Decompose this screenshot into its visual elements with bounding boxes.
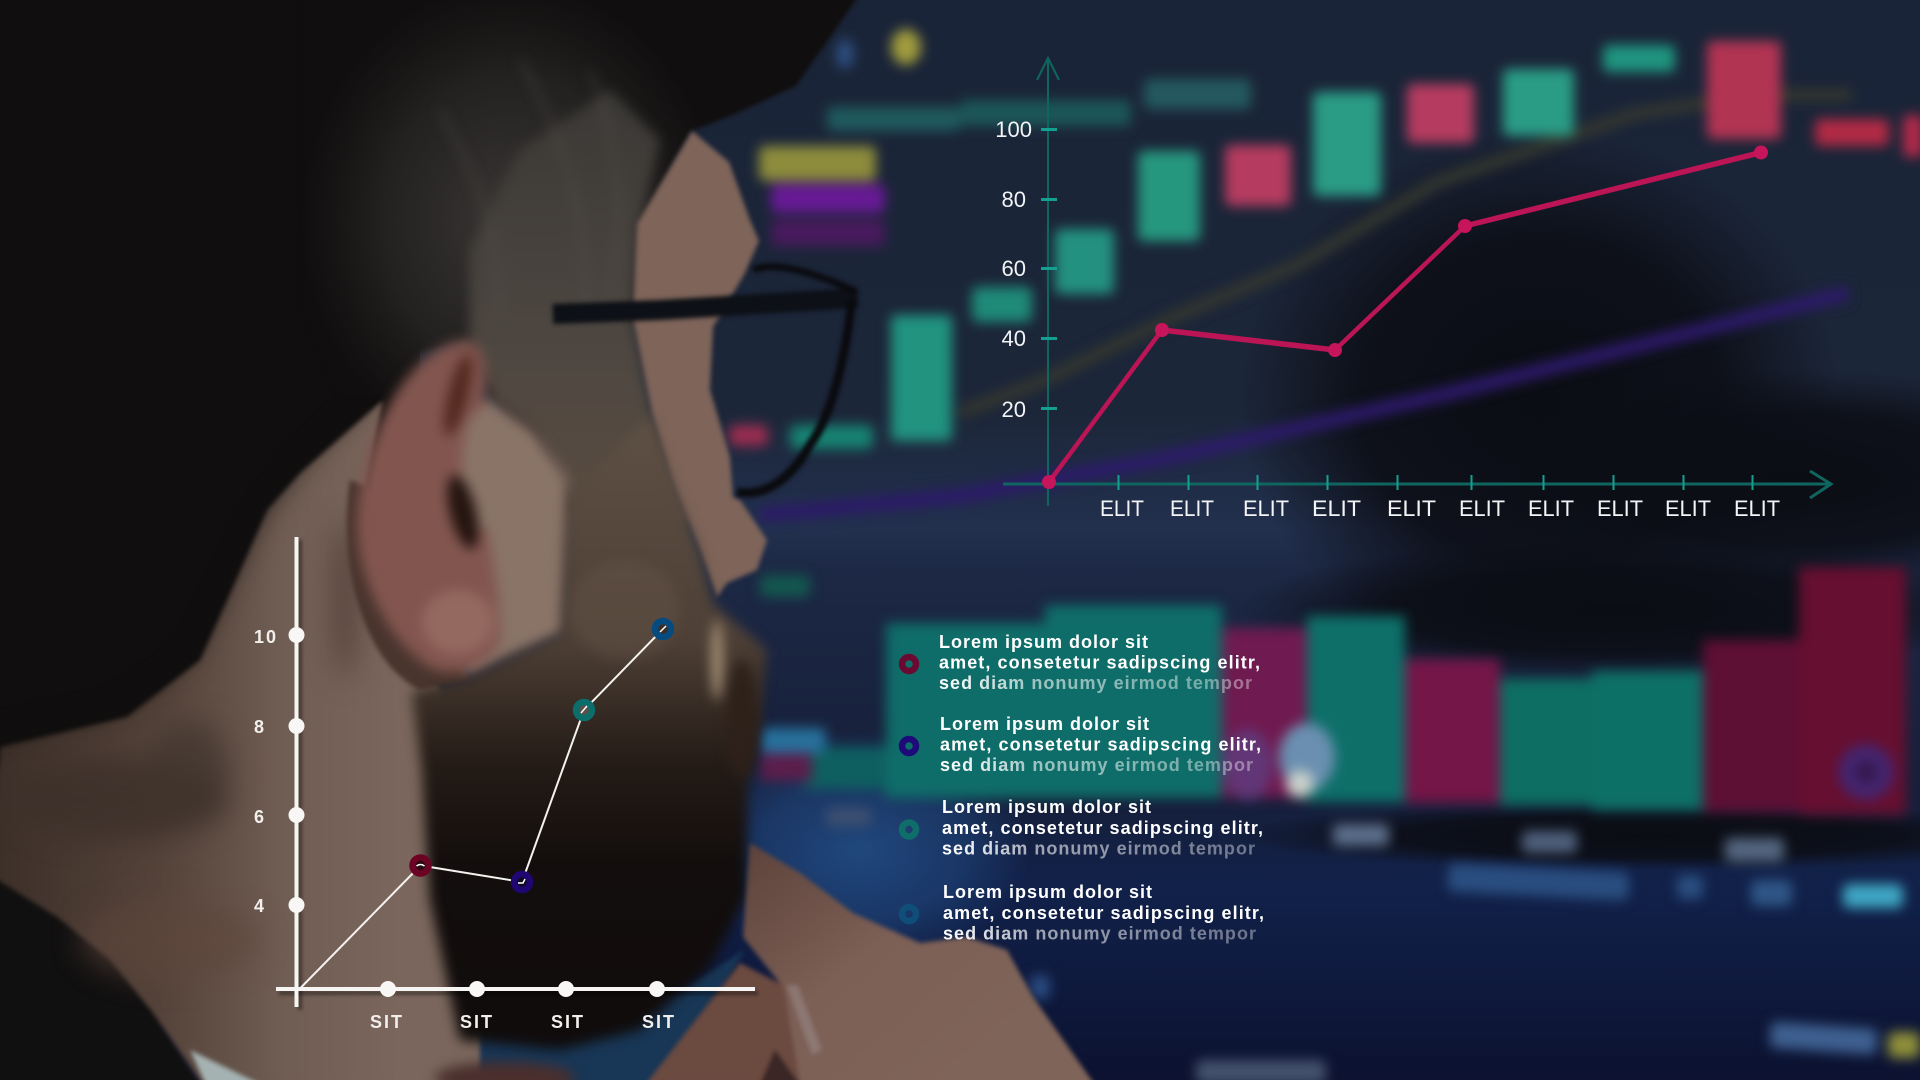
legend item: blue: sed diam nonumy eirmod tempor: [943, 924, 1256, 944]
ear shadow: [347, 480, 470, 690]
y axis labels: 60: [1002, 256, 1026, 281]
y axis ticks: [1041, 130, 1057, 408]
hand: [743, 843, 1095, 1080]
y axis with arrow: [1037, 58, 1059, 506]
hair base: [0, 0, 400, 740]
data marker: maroon: [412, 858, 428, 874]
x axis labels: SIT: [642, 1012, 674, 1032]
y axis labels: 40: [1002, 326, 1026, 351]
x axis labels: SIT: [460, 1012, 492, 1032]
chart: candlestick overlay line chart, top right: [995, 58, 1831, 521]
data marker: blue: [655, 621, 671, 637]
legend item: blue: [902, 882, 1264, 944]
skin mottling: [10, 520, 355, 980]
y axis labels: 8: [254, 717, 264, 737]
blue patch under beard: [470, 950, 745, 1080]
beard: [412, 415, 767, 1050]
legend item: indigo: sed diam nonumy eirmod tempor: [940, 755, 1253, 775]
x axis labels: ELIT: [1459, 496, 1505, 521]
white data line: [300, 629, 663, 988]
x axis ticks: [1118, 475, 1752, 490]
x axis labels: [1100, 496, 1780, 521]
x axis labels: ELIT: [1387, 496, 1436, 521]
legend item: blue: amet, consetetur sadipscing elitr,: [943, 903, 1264, 923]
y axis labels: 20: [1002, 397, 1026, 422]
legend item: blue: Lorem ipsum dolor sit: [943, 882, 1152, 902]
legend item: maroon: sed diam nonumy eirmod tempor: [939, 673, 1252, 693]
y axis labels: 10: [254, 627, 276, 647]
legend item: maroon: [902, 632, 1260, 693]
legend: [902, 632, 1264, 944]
jacket: [0, 875, 203, 1080]
x axis dots: [380, 981, 665, 997]
data marker: indigo: [514, 874, 530, 890]
ear: [357, 340, 500, 672]
y axis labels: 100: [995, 117, 1032, 142]
x axis labels: ELIT: [1597, 496, 1643, 521]
chart: white line chart, bottom left: [254, 537, 758, 1032]
legend item: indigo: [902, 714, 1261, 775]
y axis labels: [254, 627, 276, 916]
x axis labels: ELIT: [1734, 496, 1780, 521]
x axis labels: ELIT: [1528, 496, 1574, 521]
data marker: teal: [576, 702, 592, 718]
legend item: teal: Lorem ipsum dolor sit: [942, 797, 1151, 817]
collar: [190, 1050, 262, 1080]
y axis labels: 6: [254, 807, 264, 827]
sideburn: [470, 90, 690, 570]
legend item: maroon: amet, consetetur sadipscing elitr,: [939, 652, 1260, 672]
y axis labels: [995, 117, 1032, 422]
x axis labels: ELIT: [1100, 496, 1144, 521]
legend item: teal: amet, consetetur sadipscing elitr,: [942, 818, 1263, 838]
photo: man seen from behind with glasses and beard: [0, 0, 1095, 1080]
x axis labels: [370, 1012, 674, 1032]
legend item: maroon: Lorem ipsum dolor sit: [939, 632, 1148, 652]
legend item: indigo: Lorem ipsum dolor sit: [940, 714, 1149, 734]
axis drop shadows: [279, 540, 758, 1010]
axes: [276, 537, 755, 1007]
neck: [0, 400, 480, 1080]
glasses: [553, 298, 858, 314]
x axis labels: SIT: [551, 1012, 583, 1032]
temple and cheek skin: [633, 131, 767, 597]
x axis labels: ELIT: [1665, 496, 1711, 521]
dark base under hair: [0, 0, 420, 770]
x axis labels: ELIT: [1243, 496, 1289, 521]
x axis labels: ELIT: [1312, 496, 1361, 521]
x axis with arrow: [1003, 471, 1831, 498]
x axis labels: ELIT: [1170, 496, 1214, 521]
x axis labels: SIT: [370, 1012, 402, 1032]
y axis labels: 4: [254, 896, 264, 916]
y axis dots: [288, 627, 304, 913]
legend item: indigo: amet, consetetur sadipscing elitr,: [940, 734, 1261, 754]
legend item: teal: [902, 797, 1263, 858]
legend item: teal: sed diam nonumy eirmod tempor: [942, 838, 1255, 858]
red data line: [1042, 146, 1768, 489]
y axis labels: 80: [1002, 187, 1026, 212]
